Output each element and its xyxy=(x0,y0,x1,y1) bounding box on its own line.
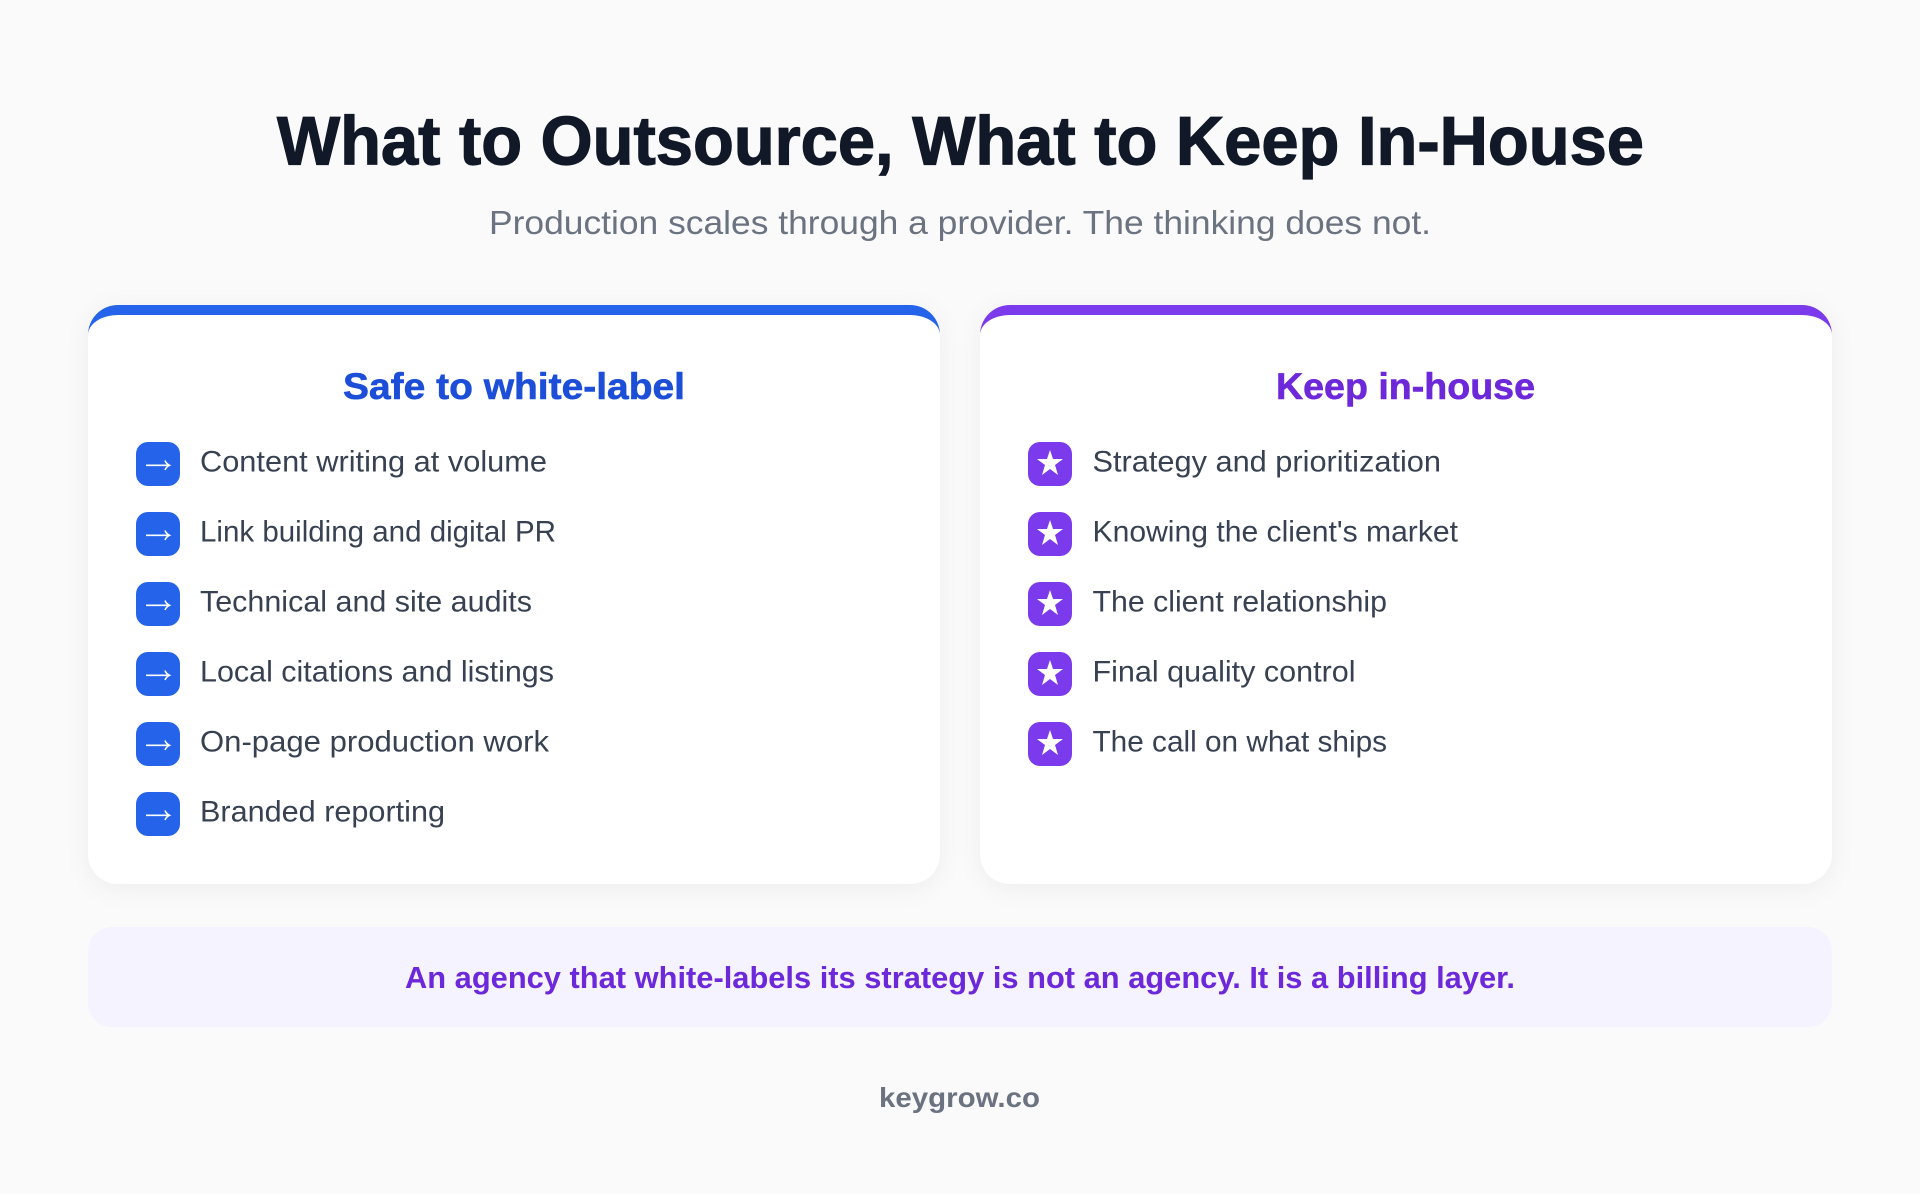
item: client market xyxy=(1028,512,1458,556)
subtitle: Production scales through a provider. The thinking does not. xyxy=(489,204,1431,241)
item: what ships xyxy=(1028,722,1387,766)
item: technical audits xyxy=(136,582,532,626)
item: client relationship: The client relationship xyxy=(1092,586,1387,618)
callout: An agency that white-labels its strategy is not an agency. It is a billing layer. xyxy=(405,960,1515,995)
item: what ships: The call on what ships xyxy=(1092,726,1387,758)
item: branded reporting: Branded reporting xyxy=(200,796,445,828)
card top accent xyxy=(980,305,1832,335)
item: local citations xyxy=(136,652,554,696)
item: link building: Link building and digital PR xyxy=(200,516,556,548)
title: What to Outsource, What to Keep In-House xyxy=(277,102,1644,180)
item: content writing xyxy=(136,442,547,486)
item: on-page production: On-page production work xyxy=(200,726,549,758)
item: quality control: Final quality control xyxy=(1092,656,1356,688)
card top accent xyxy=(88,305,940,335)
item: technical audits: Technical and site audits xyxy=(200,586,532,618)
panel: keep in-house xyxy=(980,305,1832,884)
item: local citations: Local citations and listings xyxy=(200,656,554,688)
callout xyxy=(88,927,1832,1027)
item: client relationship xyxy=(1028,582,1387,626)
item: branded reporting xyxy=(136,792,445,836)
item: strategy xyxy=(1028,442,1441,486)
item: strategy: Strategy and prioritization xyxy=(1092,446,1441,478)
card background xyxy=(980,305,1832,884)
card background xyxy=(88,305,940,884)
item: quality control xyxy=(1028,652,1356,696)
item: client market: Knowing the client's market xyxy=(1092,516,1458,548)
item: on-page production xyxy=(136,722,549,766)
footer brand: keygrow.co xyxy=(879,1082,1040,1113)
heading: Safe to white-label xyxy=(343,366,685,407)
item: link building xyxy=(136,512,556,556)
panel: safe to white-label xyxy=(88,305,940,884)
item: content writing: Content writing at volume xyxy=(200,446,547,478)
heading: Keep in-house xyxy=(1276,366,1535,407)
